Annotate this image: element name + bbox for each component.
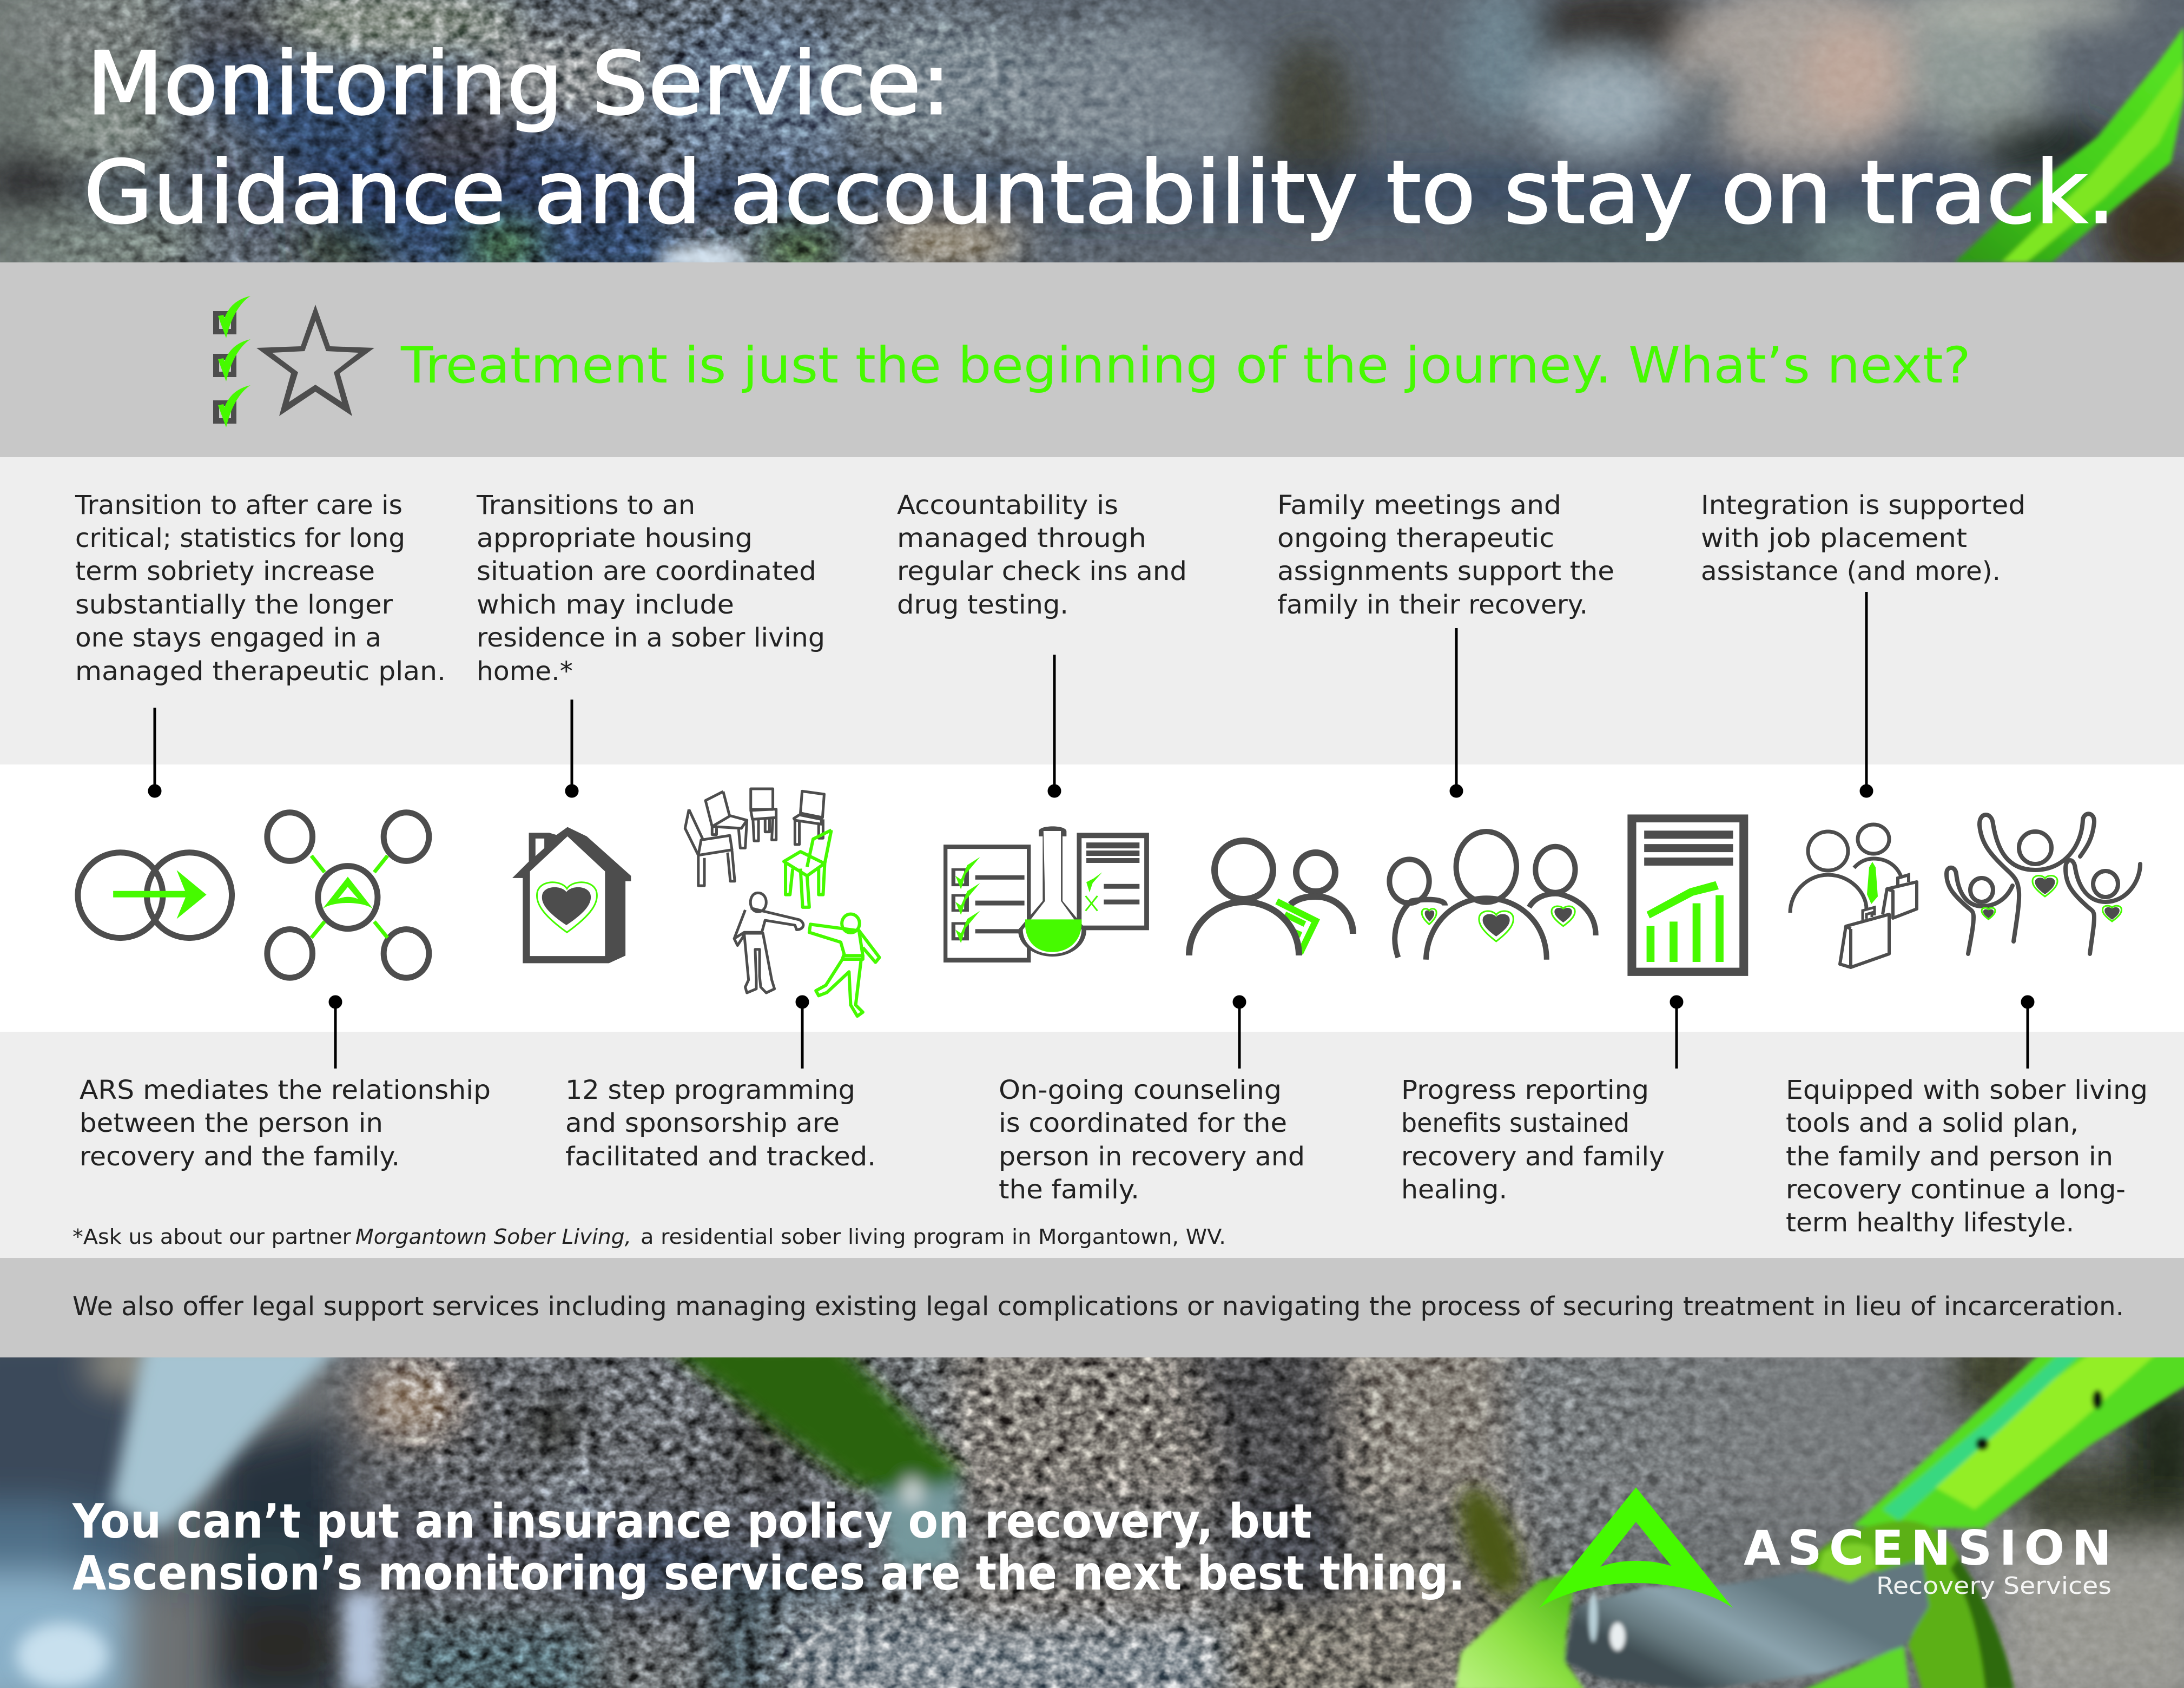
text: progress reporting: recovery and family: [1401, 1142, 1665, 1172]
text: sober living tools: Equipped with sober living: [1786, 1075, 2148, 1105]
text: after care: managed therapeutic plan.: [75, 656, 446, 687]
icon: checklist: [213, 296, 250, 427]
panel: header photo with title: [0, 0, 2184, 262]
panel: icon row left: [78, 789, 879, 1016]
text: mediation: [80, 1075, 491, 1172]
text: housing: [476, 490, 825, 687]
panel: subheading band: [213, 296, 1971, 427]
panel: footer photo with tagline and logo: [0, 1326, 2184, 1688]
text: accountability: regular check ins and: [897, 556, 1187, 586]
text: 12 step: and sponsorship are: [565, 1108, 840, 1138]
footnote: Morgantown Sober Living,: [355, 1225, 631, 1249]
tagline: Ascension’s monitoring services are the next best thing.: [72, 1546, 1465, 1601]
text: after care: substantially the longer: [75, 590, 393, 620]
icon: progress report: [1627, 814, 1748, 976]
pin lines: [149, 592, 2033, 1069]
panel: lower descriptions: [80, 1075, 2148, 1238]
text: job placement: with job placement: [1701, 523, 1967, 553]
text: housing: which may include: [477, 590, 734, 620]
text: after care: critical; statistics for long: [75, 523, 405, 553]
photo: blurred carabiner and rope: [0, 1326, 2184, 1688]
text: accountability: managed through: [897, 523, 1146, 553]
icon: job placement with briefcases: [1790, 825, 1917, 967]
text: sober living tools: recovery continue a long-: [1786, 1175, 2126, 1205]
text: family meetings: [1277, 490, 1614, 620]
text: counseling: person in recovery and: [999, 1142, 1305, 1172]
text: family meetings: Family meetings and: [1277, 490, 1561, 520]
text: after care: Transition to after care is: [75, 490, 403, 520]
text: mediation: ARS mediates the relationship: [80, 1075, 491, 1105]
text: after care: term sobriety increase: [75, 556, 375, 586]
text: counseling: the family.: [999, 1175, 1139, 1205]
text: housing: Transitions to an: [476, 490, 695, 520]
text: after care: one stays engaged in a: [75, 623, 381, 653]
footnote: *Ask us about our partner: [72, 1225, 351, 1249]
icon: clipboard, flask and report: [943, 826, 1149, 962]
text: counseling: is coordinated for the: [999, 1108, 1287, 1138]
logo tagline: Recovery Services: [1876, 1572, 2112, 1600]
text: sober living tools: term healthy lifestyle.: [1786, 1208, 2074, 1238]
icon: family with hearts: [1389, 832, 1596, 960]
text: housing: situation are coordinated: [477, 556, 816, 586]
text: 12 step: 12 step programming: [565, 1075, 855, 1105]
text: housing: residence in a sober living: [477, 623, 825, 653]
logo mark: [1539, 1487, 1733, 1608]
title: Guidance and accountability to stay on track.: [84, 142, 2115, 243]
title: Monitoring Service:: [87, 33, 951, 134]
panel: upper descriptions: [75, 490, 2025, 687]
icon: counseling pair with document: [1189, 841, 1353, 955]
photo: blurred rock and rope: [0, 0, 2184, 262]
text: after care: [75, 490, 446, 687]
icon: venn with arrow: [78, 853, 232, 938]
text: sober living tools: [1786, 1075, 2148, 1238]
page bands: [0, 262, 2184, 1358]
text: 12 step: [565, 1075, 876, 1172]
text: accountability: Accountability is: [897, 490, 1118, 520]
text: progress reporting: [1401, 1075, 1665, 1205]
icon: hub and spokes: [267, 813, 429, 978]
footnote: [72, 1225, 1226, 1249]
text: housing: home.*: [477, 656, 573, 687]
text: sober living tools: tools and a solid plan,: [1786, 1108, 2079, 1138]
legal support statement: We also offer legal support services including managing existing legal complications or navigating the process of securing treatment in lieu of incarceration.: [72, 1291, 2124, 1322]
text: job placement: Integration is supported: [1701, 490, 2025, 520]
icon: celebrating family: [1947, 814, 2140, 954]
text: progress reporting: Progress reporting: [1401, 1075, 1649, 1105]
text: 12 step: facilitated and tracked.: [565, 1142, 876, 1172]
text: mediation: recovery and the family.: [80, 1142, 400, 1172]
tagline: You can’t put an insurance policy on recovery, but: [72, 1494, 1312, 1549]
logo: [1539, 1487, 2112, 1608]
text: counseling: On-going counseling: [999, 1075, 1282, 1105]
icon: star: [256, 305, 374, 416]
text: family meetings: assignments support the: [1277, 556, 1614, 586]
text: job placement: [1701, 490, 2025, 586]
text: progress reporting: benefits sustained: [1401, 1108, 1629, 1138]
text: housing: appropriate housing: [477, 523, 753, 553]
tagline: [72, 1494, 1465, 1601]
text: accountability: drug testing.: [897, 590, 1068, 620]
panel: icon row right: [943, 814, 2140, 976]
text: progress reporting: healing.: [1401, 1175, 1507, 1205]
icon: chairs and sponsorship figures: [685, 789, 879, 1016]
title: [84, 33, 2115, 243]
subheading: Treatment is just the beginning of the journey. What’s next?: [400, 337, 1971, 394]
text: job placement: assistance (and more).: [1701, 556, 2001, 586]
text: sober living tools: the family and person in: [1786, 1142, 2113, 1172]
icon: house with heart: [512, 827, 631, 963]
footnote: a residential sober living program in Morgantown, WV.: [641, 1225, 1226, 1249]
text: family meetings: ongoing therapeutic: [1277, 523, 1554, 553]
text: family meetings: family in their recovery.: [1277, 590, 1588, 620]
logo wordmark: ASCENSION: [1744, 1520, 2112, 1576]
text: counseling: [999, 1075, 1305, 1205]
text: accountability: [897, 490, 1187, 620]
text: mediation: between the person in: [80, 1108, 383, 1138]
